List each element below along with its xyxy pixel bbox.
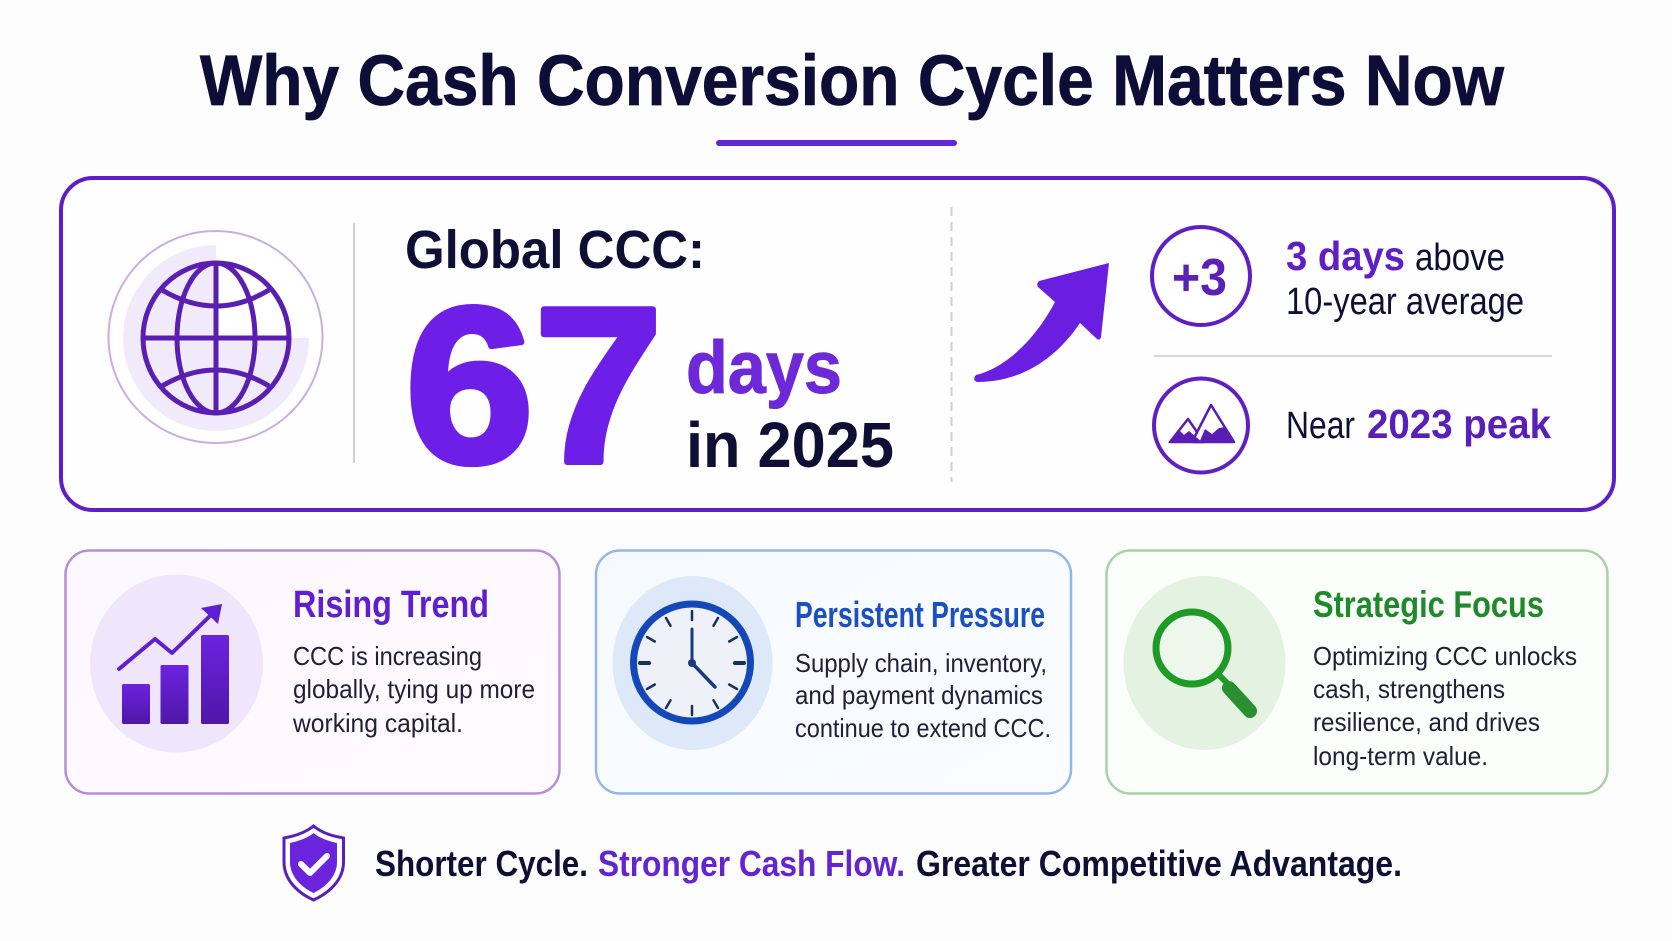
stat: 3 days above average: [1286, 233, 1524, 323]
icon: globe: [108, 231, 322, 443]
tagline: [375, 843, 1402, 884]
text: Rising Trend body: globally, tying up more: [293, 674, 535, 704]
title: Why Cash Conversion Cycle Matters Now: [200, 42, 1505, 121]
panel: global CCC headline: [61, 178, 1614, 510]
big number 67: 67: [405, 262, 663, 510]
heading: Persistent Pressure: Persistent Pressure: [795, 594, 1045, 635]
panel: Rising Trend: [66, 550, 560, 794]
panel: Strategic Focus: [1106, 550, 1608, 794]
text: Strategic Focus body: resilience, and drives: [1313, 707, 1540, 737]
icon: plus three badge: +3: [1172, 249, 1227, 307]
title underline: [716, 140, 957, 146]
heading: Rising Trend: Rising Trend: [293, 584, 489, 626]
icon: magnifying glass: [1124, 576, 1286, 750]
label: Global CCC: Global CCC:: [405, 220, 705, 280]
text: Strategic Focus body: Optimizing CCC unlocks: [1313, 641, 1577, 671]
icon: rising bar chart: [90, 574, 263, 752]
year: in 2025: in 2025: [686, 409, 894, 481]
arrow: rising: [974, 263, 1109, 382]
panel: Persistent Pressure: [596, 550, 1071, 794]
stat: near 2023 peak: 2023 peak: [1367, 401, 1551, 447]
text: Persistent Pressure body: continue to extend CCC.: [795, 713, 1051, 743]
stat: 3 days above average: 3 days: [1286, 233, 1405, 279]
icon: clock: [612, 576, 772, 750]
icon: plus three badge: [1152, 227, 1250, 325]
tagline: Greater Competitive Advantage.: [916, 843, 1402, 884]
text: Strategic Focus body: [1313, 641, 1577, 771]
text: Rising Trend body: CCC is increasing: [293, 641, 482, 671]
text: Rising Trend body: working capital.: [292, 708, 463, 738]
tagline: Stronger Cash Flow.: [598, 843, 905, 884]
text: Rising Trend body: [292, 641, 535, 738]
heading: Strategic Focus: Strategic Focus: [1313, 584, 1544, 625]
text: Strategic Focus body: long-term value.: [1313, 741, 1488, 771]
icon: shield with check: [284, 826, 344, 900]
stat: near 2023 peak: [1286, 401, 1551, 447]
stat: 3 days above average: 10-year average: [1286, 281, 1524, 323]
text: Persistent Pressure body: and payment dynamics: [795, 680, 1043, 710]
text: Persistent Pressure body: Supply chain, inventory,: [795, 648, 1047, 678]
unit: days: days: [686, 326, 842, 409]
text: Strategic Focus body: cash, strengthens: [1313, 674, 1505, 704]
stat: near 2023 peak: Near: [1286, 405, 1355, 447]
stat: 3 days above average: above: [1415, 237, 1505, 279]
tagline: Shorter Cycle.: [375, 843, 588, 884]
text: Persistent Pressure body: [795, 648, 1051, 743]
icon: mountain peak badge: [1154, 378, 1248, 472]
